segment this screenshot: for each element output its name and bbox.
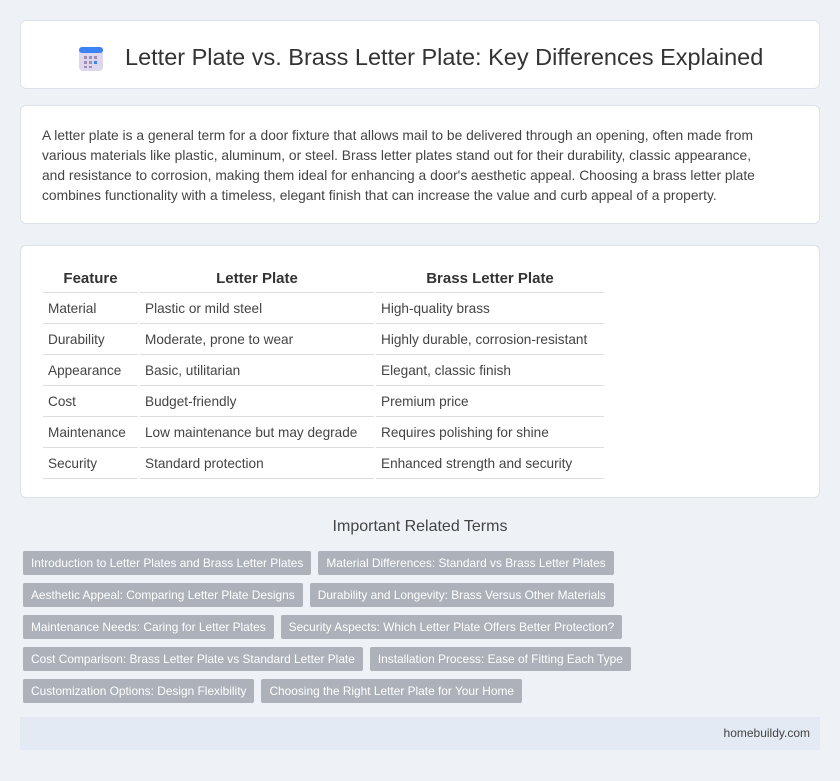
comparison table: Security (48, 456, 97, 470)
comparison table: Budget-friendly (145, 394, 236, 408)
related terms tags: Cost Comparison: Brass Letter Plate vs Standard Letter Plate (31, 652, 355, 666)
comparison table: Appearance (48, 362, 121, 378)
comparison table: Feature (63, 270, 118, 286)
comparison table: Highly durable, corrosion-resistant (381, 332, 587, 346)
comparison table: Elegant, classic finish (381, 362, 511, 378)
related terms tags: Aesthetic Appeal: Comparing Letter Plate Designs (31, 588, 295, 602)
comparison table: Plastic or mild steel (145, 300, 262, 316)
related terms tags: Security Aspects: Which Letter Plate Offers Better Protection? (289, 620, 614, 634)
related terms tags: Maintenance Needs: Caring for Letter Plates (31, 620, 266, 634)
header card (20, 20, 820, 89)
comparison table: Requires polishing for shine (381, 424, 549, 440)
intro text card (20, 105, 820, 224)
comparison table: Durability (48, 332, 105, 346)
related terms heading: Important Related Terms (333, 518, 507, 535)
related terms tags: Customization Options: Design Flexibility (31, 684, 246, 698)
comparison table: Low maintenance but may degrade (145, 424, 357, 440)
icon: calendar (79, 47, 103, 71)
comparison table: Moderate, prone to wear (145, 332, 293, 346)
related terms tags: Durability and Longevity: Brass Versus Other Materials (318, 588, 606, 602)
comparison table: High-quality brass (381, 300, 490, 316)
related terms tags: Introduction to Letter Plates and Brass Letter Plates (31, 556, 303, 570)
comparison table: Letter Plate (216, 270, 298, 286)
related terms tags (23, 551, 631, 703)
title: Letter Plate vs. Brass Letter Plate: Key Differences Explained (125, 44, 763, 70)
comparison table: Standard protection (145, 456, 264, 470)
related terms tags: Choosing the Right Letter Plate for Your Home (269, 684, 514, 698)
comparison table: Maintenance (48, 424, 126, 440)
intro text card: A letter plate is a general term for a door fixture that allows mail to be delivered through an opening, often made from various materials like plastic, aluminum, or steel. Brass letter plates stand out for their durability, classic appearance, and resistance to corrosion, making them ideal for enhancing a door's aesthetic appeal. Choosing a brass letter plate combines functionality with a timeless, elegant finish that can increase the value and curb appeal of a property. (42, 128, 755, 203)
footer: homebuildy.com (724, 726, 810, 740)
related terms tags: Installation Process: Ease of Fitting Each Type (378, 652, 623, 666)
related terms tags: Material Differences: Standard vs Brass Letter Plates (326, 556, 606, 570)
comparison table: Brass Letter Plate (426, 270, 554, 286)
footer (20, 717, 820, 750)
comparison table (43, 270, 604, 479)
comparison table card (20, 245, 820, 498)
comparison table: Premium price (381, 394, 469, 408)
comparison table: Material (48, 300, 96, 316)
comparison table: Basic, utilitarian (145, 362, 240, 378)
comparison table: Enhanced strength and security (381, 456, 572, 470)
comparison table: Cost (48, 394, 76, 408)
